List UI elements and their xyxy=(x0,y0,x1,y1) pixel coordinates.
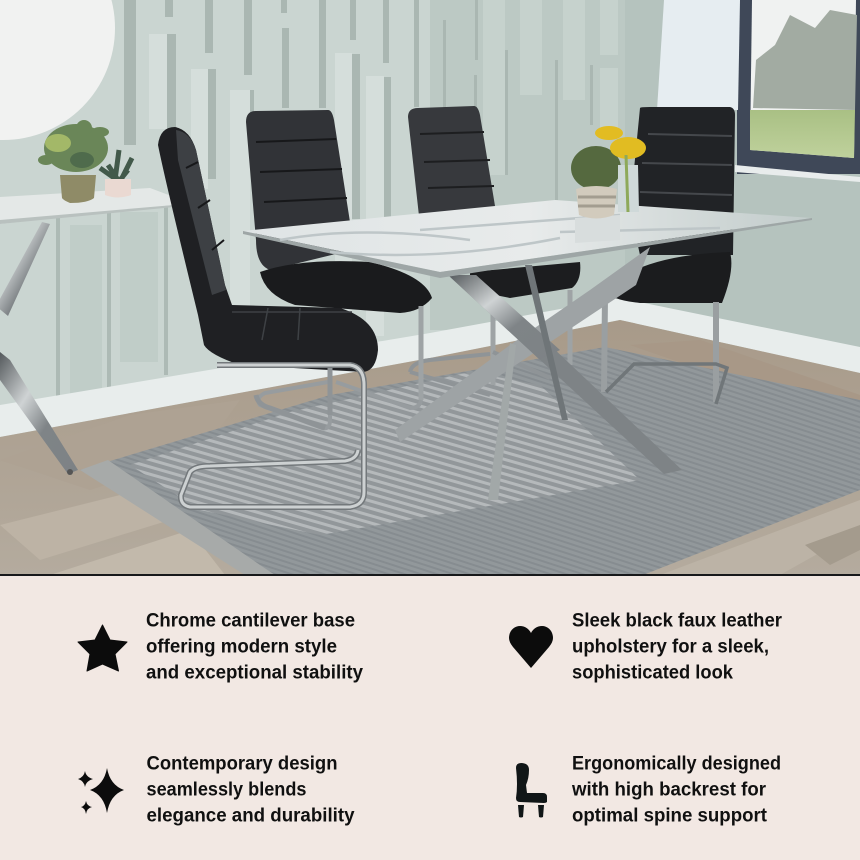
text: contemporary design: elegance and durability xyxy=(146,804,355,826)
text: ergonomic: Ergonomically designed xyxy=(572,752,781,774)
text: contemporary design: seamlessly blends xyxy=(146,778,307,800)
text: chrome base: Chrome cantilever base xyxy=(146,610,355,632)
feature: contemporary design xyxy=(78,752,355,826)
text: chrome base: offering modern style xyxy=(146,636,337,658)
icon: sparkles xyxy=(78,768,124,814)
lower wall panels xyxy=(70,212,158,395)
photo: dining room scene xyxy=(0,0,860,575)
feature: black faux leather xyxy=(509,610,782,684)
floor xyxy=(0,320,860,575)
curtain xyxy=(657,0,740,110)
text: faux leather: sophisticated look xyxy=(572,662,733,684)
rug xyxy=(80,347,860,575)
icon: chair xyxy=(516,763,547,818)
chair: back right xyxy=(604,107,735,404)
table base xyxy=(395,247,682,500)
feature: ergonomic backrest xyxy=(516,752,781,826)
text: chrome base: and exceptional stability xyxy=(146,662,363,684)
text: contemporary design: Contemporary design xyxy=(146,752,338,774)
mirror xyxy=(0,0,115,140)
feature: chrome base xyxy=(78,610,363,684)
text: faux leather: Sleek black faux leather xyxy=(572,610,782,632)
wall xyxy=(0,0,860,440)
console table xyxy=(0,188,174,475)
potted plants xyxy=(38,120,132,203)
text: ergonomic: optimal spine support xyxy=(572,804,767,826)
icon: heart xyxy=(509,626,553,668)
marble table top xyxy=(243,200,812,278)
icon: star xyxy=(78,625,127,671)
features panel xyxy=(0,574,860,860)
table centrepiece xyxy=(571,126,646,218)
baseboard xyxy=(0,298,860,437)
text: faux leather: upholstery for a sleek, xyxy=(572,636,769,658)
text: ergonomic: with high backrest for xyxy=(571,778,766,800)
window xyxy=(735,0,860,182)
chair: front left xyxy=(158,127,378,507)
chair: front centre xyxy=(246,110,432,428)
chair: back centre xyxy=(408,106,580,395)
